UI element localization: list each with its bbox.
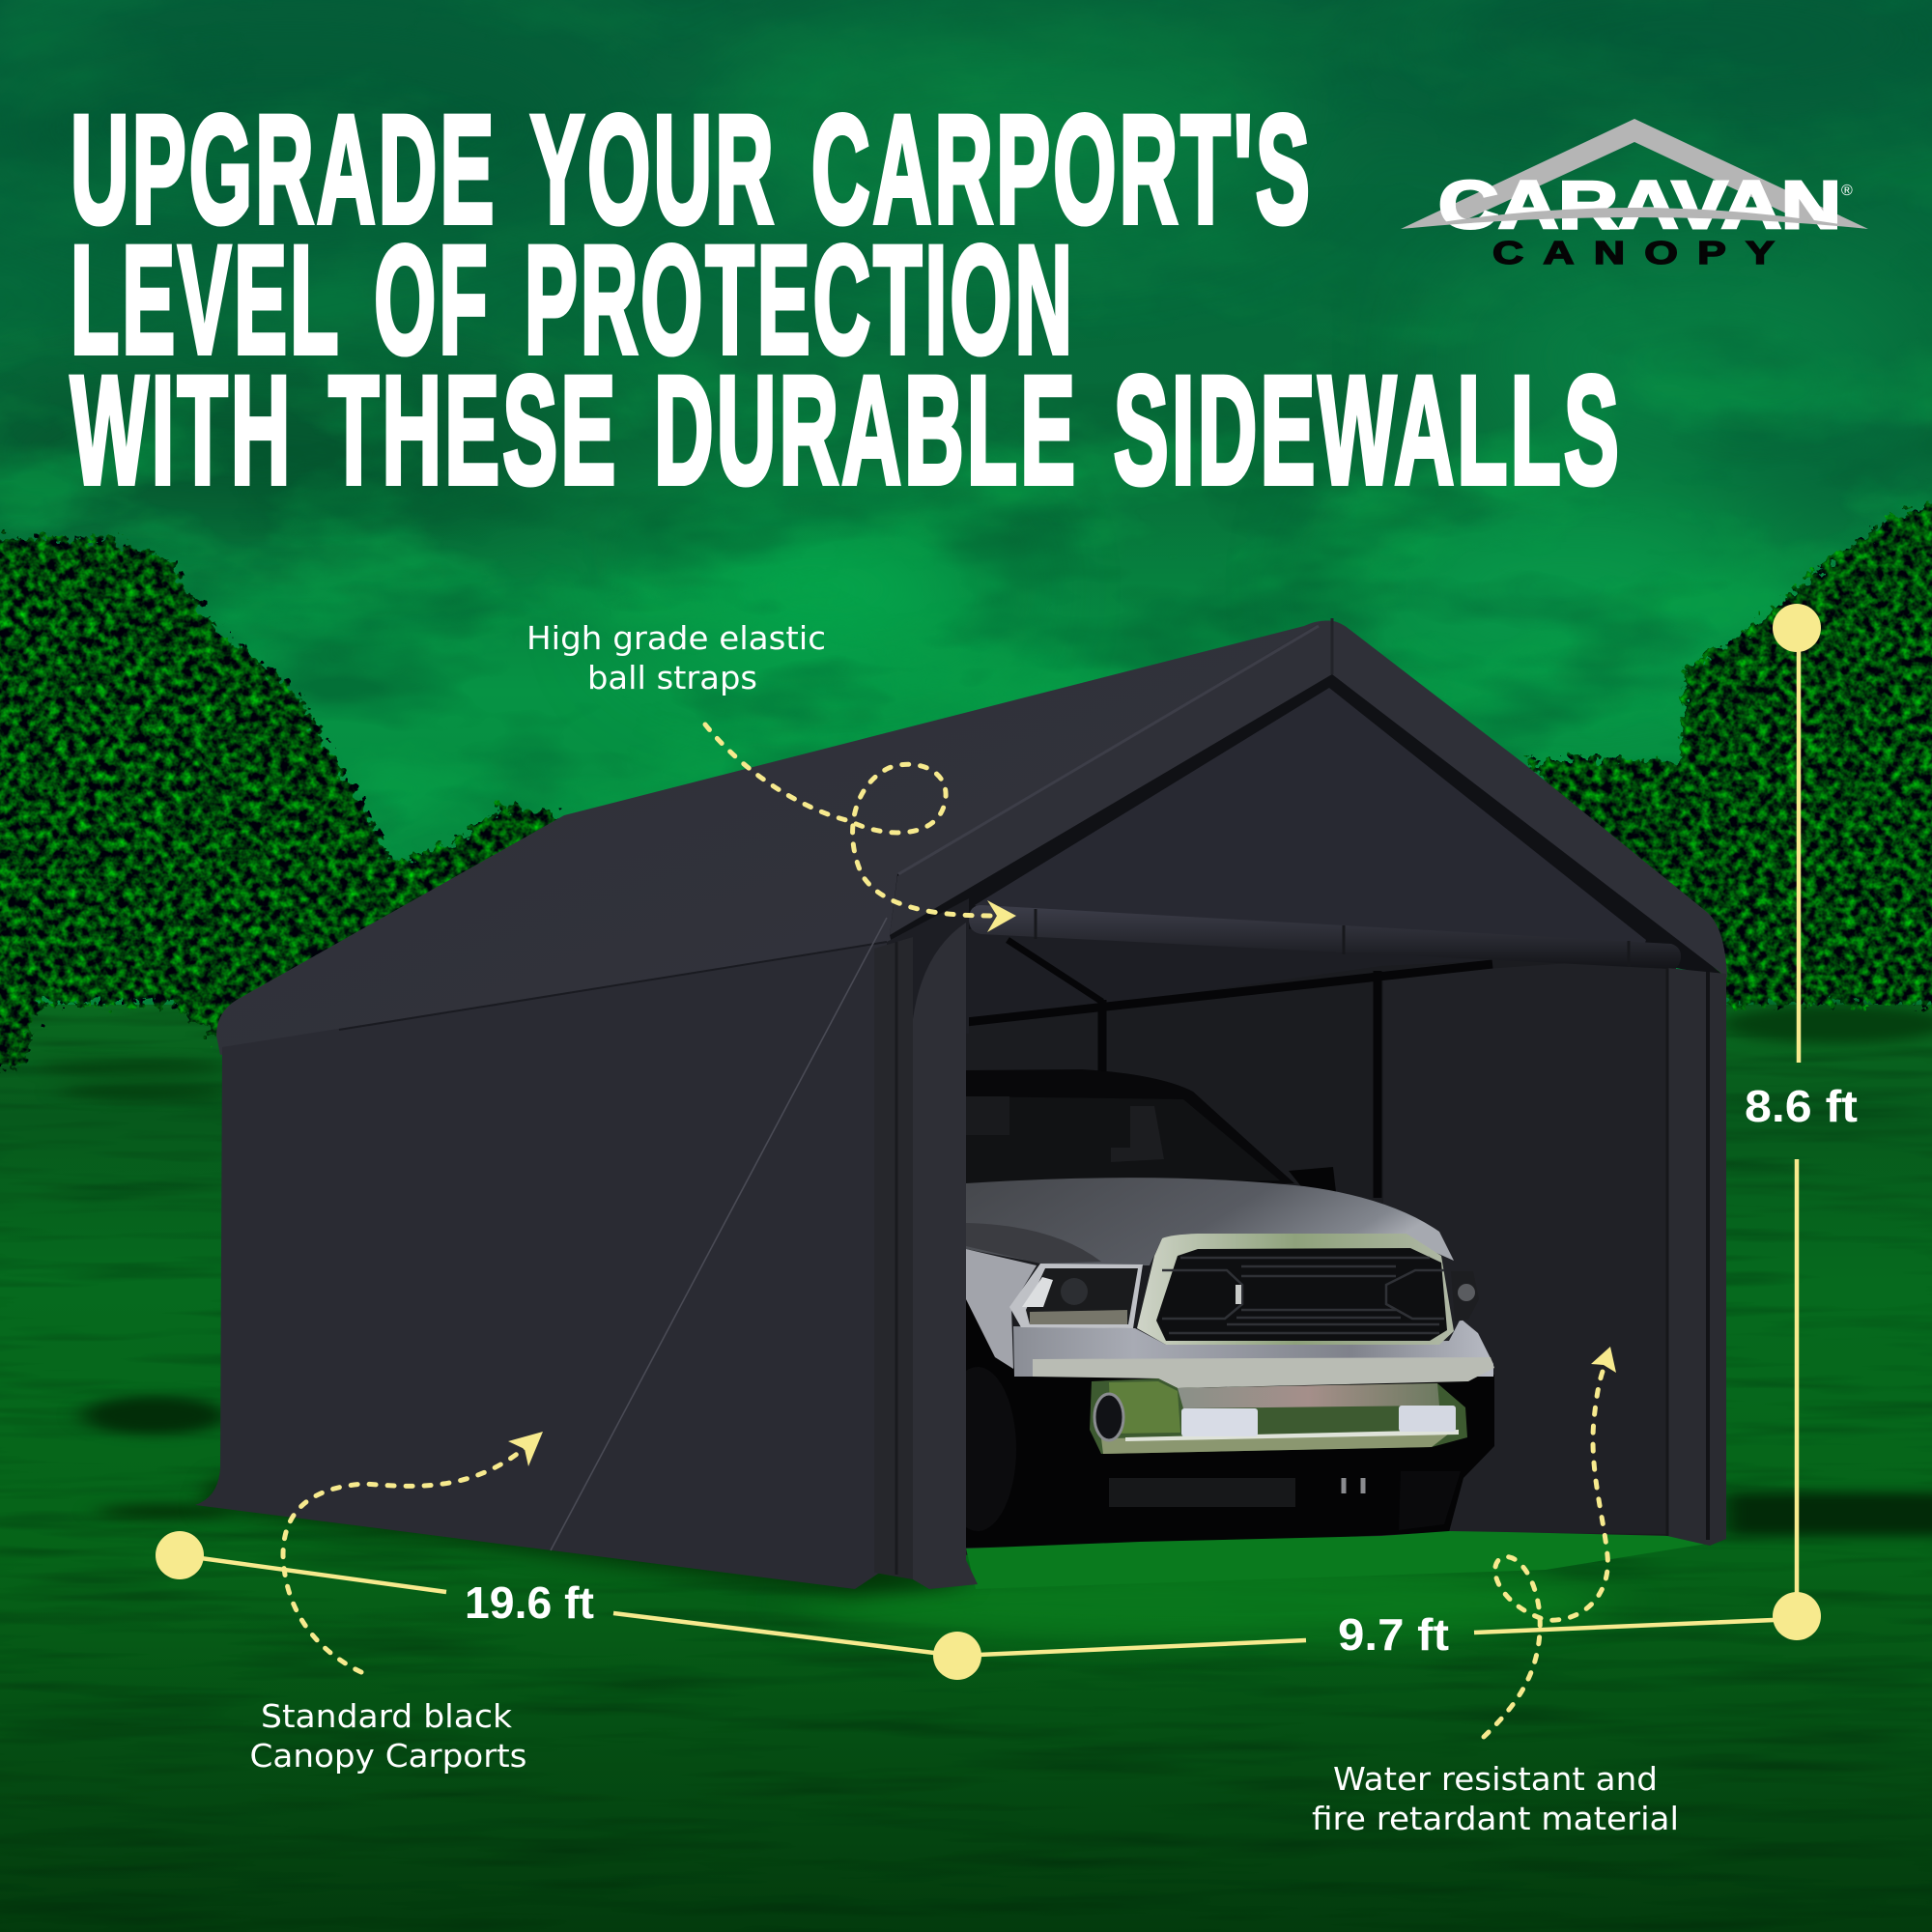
canopy front rim: [890, 620, 1727, 978]
lower body dark: [966, 1299, 1494, 1548]
trees: [0, 493, 1932, 1072]
callout: water resistant: Water resistant and: [1333, 1760, 1658, 1798]
mirror: [1289, 1167, 1336, 1192]
canopy front gable: [975, 688, 1646, 952]
headlight right: [1451, 1271, 1479, 1321]
19.6 ft: 19.6 ft: [465, 1577, 594, 1628]
background grass: [0, 1005, 1932, 1932]
seam line: [339, 942, 887, 1030]
logo: Caravan Canopy: [1401, 119, 1868, 271]
logo wordmark: CARAVAN: [1438, 167, 1841, 242]
logo roof: [1401, 119, 1868, 229]
callout: ball straps: High grade elastic: [526, 619, 826, 657]
arrow: black canopy: [283, 1444, 529, 1672]
zipper line: [551, 918, 887, 1550]
dashed arrows: [283, 724, 1607, 1737]
logo arc: [1401, 208, 1868, 229]
fog light panel left: [1181, 1408, 1258, 1436]
height line top: [1797, 628, 1801, 1063]
rim seam: [1331, 618, 1333, 674]
bumper left block: [1109, 1381, 1180, 1434]
interior right wall: [1383, 956, 1671, 1534]
truck: [939, 1069, 1494, 1548]
logo subtitle: CANOPY: [1492, 236, 1794, 271]
canopy side wall: [195, 942, 887, 1589]
rafters and purlins: [966, 940, 1492, 1198]
fender dark: [966, 1223, 1101, 1264]
hood: [966, 1178, 1454, 1265]
bumper lower band: [1101, 1434, 1449, 1454]
length line left: [180, 1555, 446, 1592]
front pole: [969, 905, 1681, 969]
tree: small back left: [382, 807, 570, 927]
exhaust glints: [1344, 1478, 1363, 1493]
8.6 ft: 8.6 ft: [1745, 1081, 1858, 1131]
dimension lines: [180, 628, 1799, 1656]
callout labels: ball straps: [587, 659, 757, 696]
bumper chrome: [1090, 1378, 1467, 1454]
bumper upper band: [1178, 1383, 1439, 1408]
front body: [1013, 1319, 1493, 1377]
tree: right: [1681, 493, 1932, 1005]
title: [71, 83, 1622, 516]
body strip: [1033, 1357, 1494, 1388]
dimension dots: [156, 604, 1821, 1680]
grille: [1156, 1248, 1447, 1341]
callout labels: Canopy Carports: [249, 1737, 527, 1775]
rim crease: [898, 626, 1319, 874]
truck cab: [966, 1069, 1294, 1198]
registered mark: ®: [1841, 183, 1853, 199]
callout: black canopy: Standard black: [261, 1697, 513, 1735]
interior ceiling: [956, 918, 1676, 1026]
ground inside: [966, 1531, 1719, 1589]
background sky: [0, 0, 1932, 1063]
width line right: [1474, 1619, 1797, 1633]
callout labels: fire retardant material: [1312, 1800, 1679, 1837]
left folds: [874, 937, 913, 1579]
ground shadow: [198, 1478, 976, 1596]
pole joints: [1036, 909, 1629, 967]
left post: [913, 923, 978, 1589]
seats: [1111, 1106, 1164, 1162]
fog lamp round: [1094, 1394, 1123, 1440]
grille chrome: [1137, 1234, 1454, 1345]
callout labels: [249, 619, 1679, 1837]
tree: left: [0, 538, 407, 1072]
height line bottom: [1795, 1159, 1799, 1616]
length line right: [613, 1613, 957, 1656]
canopy side roof: [216, 620, 1348, 1055]
headlight left: [1009, 1264, 1143, 1328]
grille accent: [1236, 1285, 1241, 1304]
rear tire right: [1399, 1471, 1461, 1530]
fender silver: [966, 1249, 1037, 1369]
arrow: water resistant: [1484, 1369, 1607, 1737]
tree line: back right: [1526, 759, 1748, 1005]
right post: [1667, 968, 1726, 1546]
width line left: [957, 1640, 1306, 1656]
wheel left: [939, 1367, 1016, 1531]
arrowheads: [508, 900, 1616, 1466]
gable backing: [890, 657, 1726, 978]
9.7 ft: 9.7 ft: [1338, 1609, 1449, 1660]
interior back wall: [956, 918, 1676, 1555]
dimension labels: [465, 1081, 1858, 1660]
skid plate: [1109, 1478, 1295, 1507]
grille slats: [1162, 1258, 1444, 1333]
carport: [195, 618, 1727, 1596]
windshield: [966, 1096, 1280, 1183]
left post shadow: [887, 898, 969, 1034]
fog light panel right: [1399, 1406, 1456, 1432]
arrow: ball straps: [705, 724, 993, 916]
